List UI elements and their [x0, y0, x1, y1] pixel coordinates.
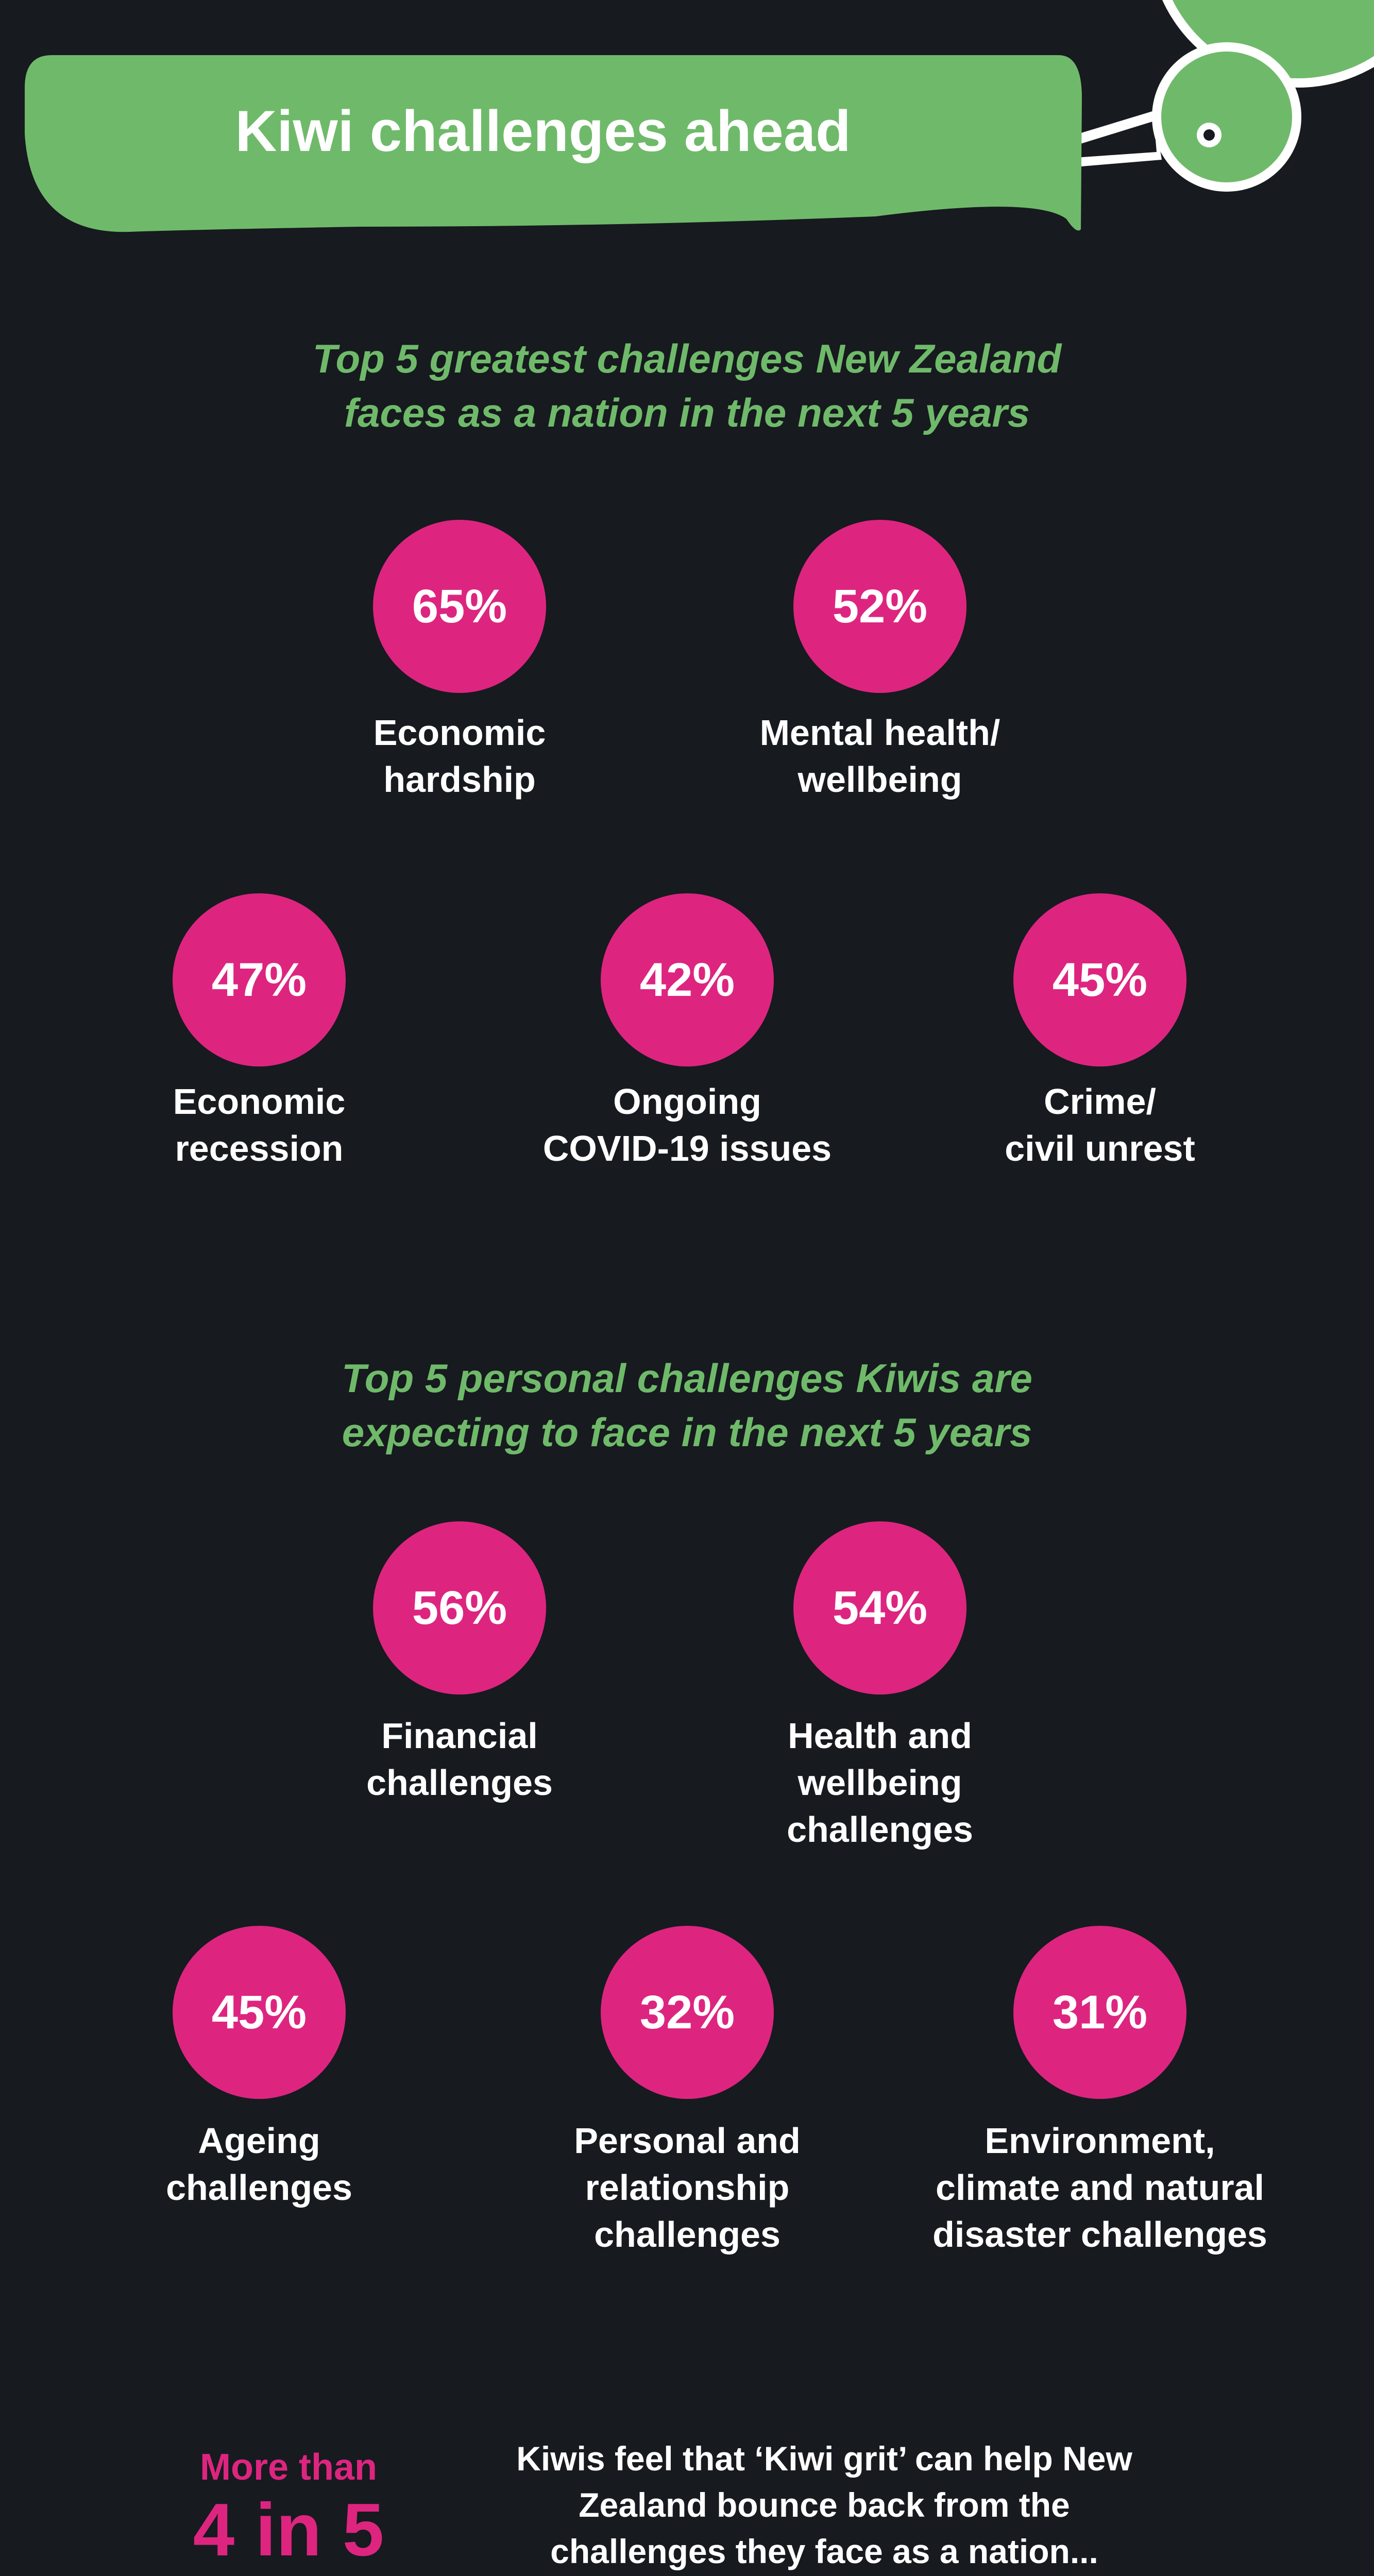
national stats: wellbeing: [798, 759, 962, 800]
stat 47%: [173, 893, 346, 1066]
national stats: hardship: [383, 759, 536, 800]
subtitle: national challenges: [313, 336, 1062, 435]
personal stats: challenges: [594, 2214, 781, 2255]
stat 42%: [601, 893, 774, 1066]
kiwi head: [1152, 42, 1301, 192]
national stats: recession: [175, 1128, 343, 1168]
stat 65%: [373, 520, 546, 693]
national stats: [173, 520, 1195, 1168]
national stats: civil unrest: [1005, 1128, 1195, 1168]
grit stat 4 in 5: [193, 2439, 1132, 2571]
grit stat 4 in 5: More than: [200, 2447, 377, 2488]
stat 54%: [793, 1521, 966, 1694]
national stats: Ongoing: [613, 1081, 761, 1122]
national stats: Economic: [173, 1081, 345, 1122]
stat 45%: [1013, 893, 1186, 1066]
national stats: Economic: [374, 713, 546, 753]
stat 52%: 52%: [833, 580, 927, 633]
subtitle: national challenges: Top 5 greatest challenges New Zealand: [313, 336, 1061, 381]
personal stats: challenges: [366, 1762, 553, 1803]
stat 56%: [373, 1521, 546, 1694]
stat 31%: 31%: [1053, 1986, 1147, 2038]
personal stats: climate and natural: [936, 2167, 1264, 2208]
stat 32%: 32%: [640, 1986, 735, 2038]
personal stats: wellbeing: [798, 1762, 962, 1803]
stat 54%: 54%: [833, 1582, 927, 1634]
stat 32%: [601, 1926, 774, 2099]
grit stat 4 in 5: Zealand bounce back from the: [579, 2486, 1070, 2524]
subtitle: personal challenges: [342, 1355, 1032, 1455]
grit stat 4 in 5: challenges they face as a nation...: [550, 2532, 1098, 2570]
personal stats: [166, 1521, 1267, 2255]
title banner: [25, 55, 1082, 232]
national stats: COVID-19 issues: [543, 1128, 832, 1168]
personal stats: Ageing: [198, 2121, 320, 2161]
title: Kiwi challenges ahead: [235, 99, 851, 163]
personal stats: Environment,: [985, 2121, 1215, 2161]
stat 45%: 45%: [1053, 953, 1147, 1006]
stat 45% ageing: 45%: [212, 1986, 307, 2038]
personal stats: relationship: [585, 2167, 789, 2208]
grit stat 4 in 5: Kiwis feel that ‘Kiwi grit’ can help New: [516, 2439, 1132, 2478]
stat 42%: 42%: [640, 953, 735, 1006]
kiwi body: [1149, 0, 1374, 88]
stat 65%: 65%: [412, 580, 507, 633]
subtitle: national challenges: faces as a nation in the next 5 years: [344, 390, 1030, 435]
stat 45% ageing: [173, 1926, 346, 2099]
personal stats: Financial: [381, 1716, 538, 1756]
grit stat 4 in 5: 4 in 5: [193, 2488, 384, 2571]
stat 31%: [1013, 1926, 1186, 2099]
personal stats: Personal and: [574, 2121, 801, 2161]
stat 52%: [793, 520, 966, 693]
national stats: Mental health/: [760, 713, 1000, 753]
personal stats: disaster challenges: [932, 2214, 1267, 2255]
subtitle: personal challenges: Top 5 personal challenges Kiwis are: [342, 1355, 1032, 1401]
personal stats: Health and: [788, 1716, 972, 1756]
subtitle: personal challenges: expecting to face in the next 5 years: [342, 1410, 1032, 1455]
personal stats: challenges: [787, 1809, 973, 1850]
stat 56%: 56%: [412, 1582, 507, 1634]
header graphics: banner and kiwi: [25, 0, 1374, 232]
personal stats: challenges: [166, 2167, 352, 2208]
stat 47%: 47%: [212, 953, 307, 1006]
national stats: Crime/: [1044, 1081, 1156, 1122]
kiwi beak: [1036, 111, 1162, 170]
